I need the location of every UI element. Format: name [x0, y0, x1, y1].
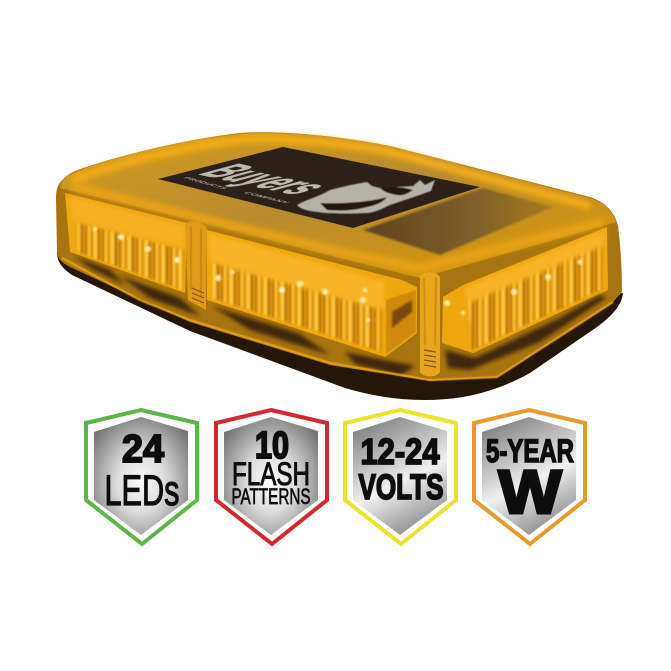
black base: [57, 252, 623, 400]
products tagline: PRODUCTS: [181, 177, 229, 190]
LEDs: LEDs: [104, 467, 180, 515]
right LED module: [442, 227, 608, 353]
left LED module: [65, 193, 187, 293]
W: W: [498, 458, 562, 526]
badge: 10 flash patterns: [216, 410, 327, 544]
VOLTS: VOLTS: [358, 468, 444, 507]
amber LED light bar: [56, 132, 623, 400]
badge: 12-24 volts: [345, 410, 456, 544]
LED hot spots: [215, 270, 370, 322]
badge: 24 LEDs: [86, 410, 197, 544]
grey-brown rear panel: [363, 188, 553, 255]
LED hot spots: [93, 227, 180, 263]
5-YEAR: 5-YEAR: [486, 433, 574, 469]
Buyers wordmark: Buyers: [184, 160, 346, 199]
badge: 5-year warranty: [474, 410, 585, 544]
center LED module: [207, 230, 417, 357]
PATTERNS: PATTERNS: [232, 484, 310, 509]
dark band beneath modules: [74, 256, 606, 376]
12-24: 12-24: [360, 431, 440, 472]
amber edge highlight: [62, 258, 613, 380]
lens top surface: [60, 133, 616, 278]
FLASH: FLASH: [232, 456, 310, 492]
company tagline: COMPANY: [241, 192, 291, 204]
24: 24: [122, 428, 164, 471]
10: 10: [255, 425, 289, 467]
amber lens body: [56, 132, 622, 381]
logo plate: [158, 147, 480, 228]
module end face: [386, 290, 416, 354]
bulldog mascot: [297, 180, 435, 214]
right mounting post: [420, 272, 440, 376]
LED hot spots: [444, 260, 582, 315]
bright rim glow on top surface: [72, 139, 604, 268]
left mounting post: [185, 221, 207, 310]
